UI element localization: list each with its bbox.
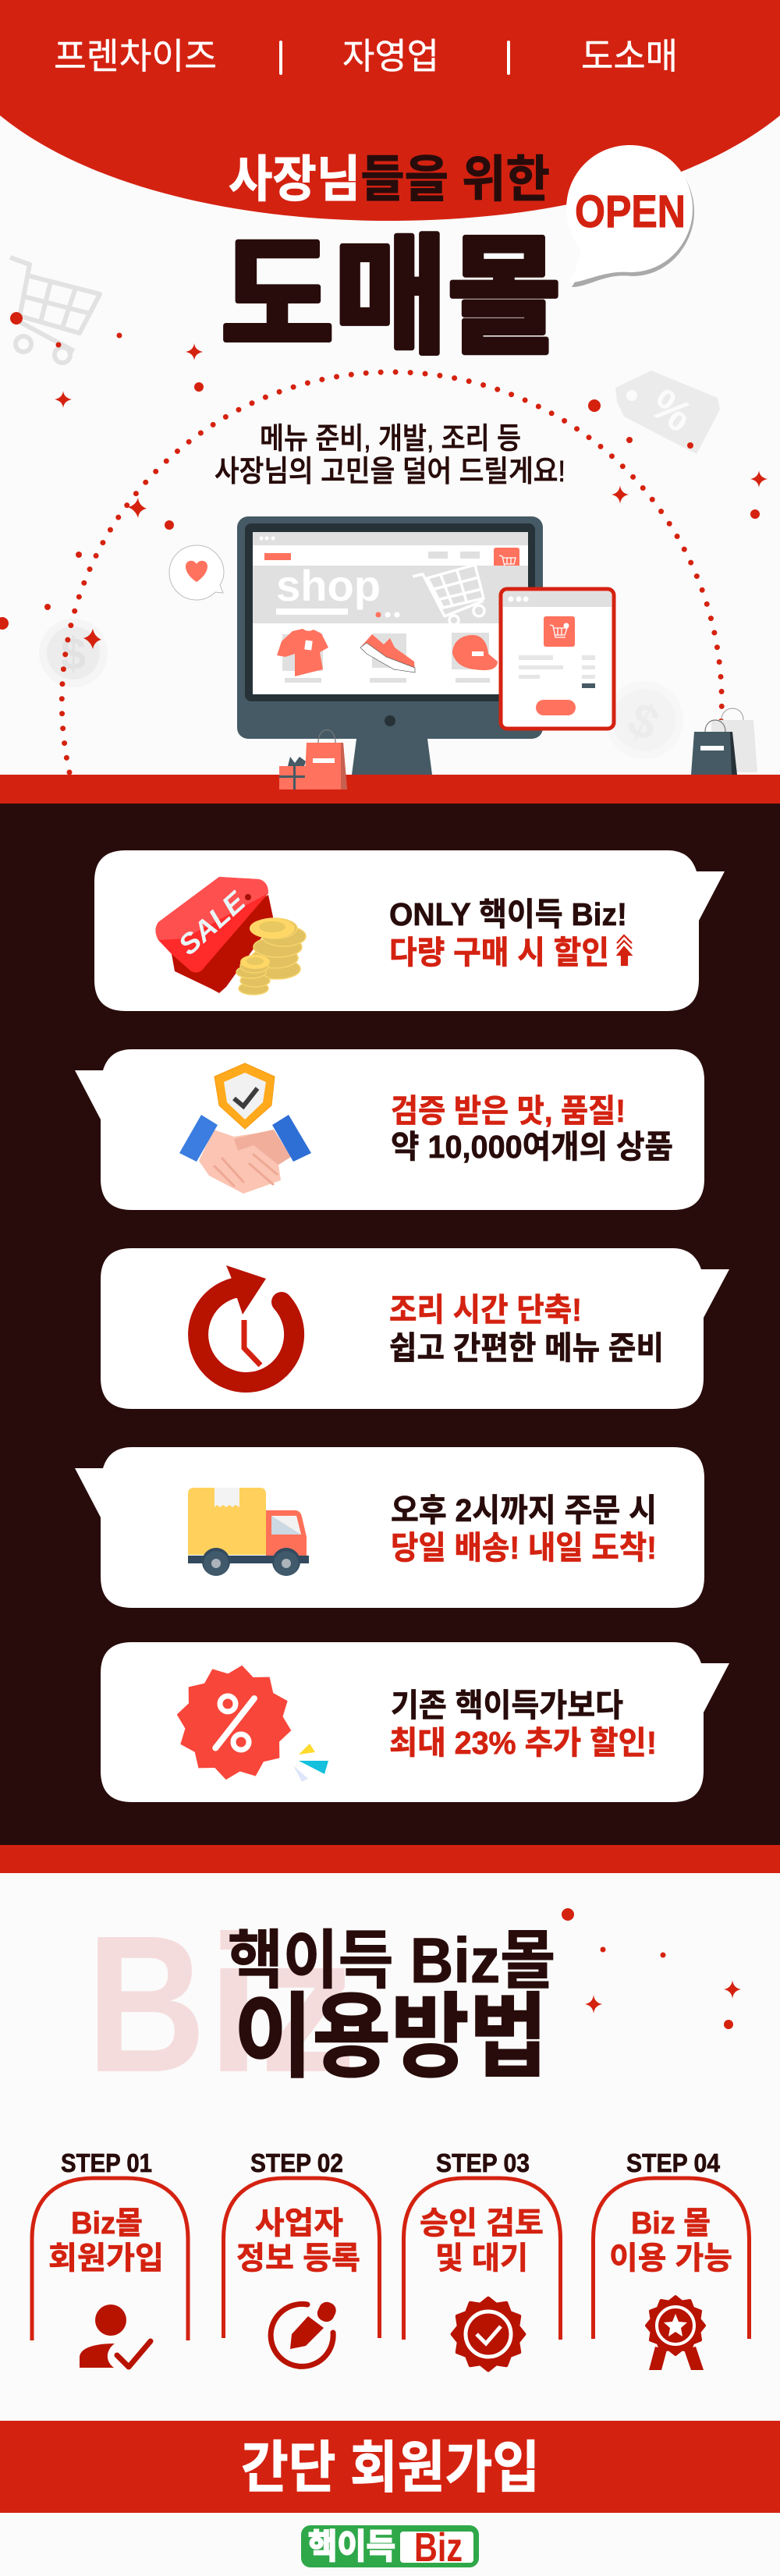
icon: faded dollar coin left: [39, 619, 108, 687]
monitor stand: [352, 739, 432, 775]
step 1: [32, 2148, 188, 2368]
OPEN text: OPEN: [575, 186, 686, 237]
illustration: desktop monitor shop: shop: [276, 561, 381, 610]
banner: [253, 566, 528, 623]
monitor body: [237, 516, 543, 739]
icon: faded shopping cart: [10, 257, 100, 363]
screen nav: [264, 553, 291, 560]
step 2: [223, 2148, 379, 2366]
screen top bar: [253, 532, 528, 545]
ghost Biz watermark: i: [207, 1895, 261, 2113]
nav: franchise: 프렌차이즈: [54, 36, 217, 76]
icon: sale tag and coins: SALE: [172, 885, 252, 961]
big coin stack: [251, 918, 306, 979]
step 1: 회원가입: [48, 2241, 164, 2276]
step 4: 이용 가능: [609, 2241, 732, 2276]
illustration: shopping bags right: [691, 708, 757, 775]
icon: percent badge: [168, 1657, 328, 1788]
arch: [32, 2178, 188, 2340]
ghost Biz watermark: [87, 1895, 356, 2113]
arch: [593, 2178, 749, 2339]
title line 1: 사장님들을 위한: [229, 151, 550, 208]
card: extra discount: [101, 1642, 729, 1802]
icon: shield and handshake: [179, 1063, 311, 1194]
icon: up arrows: [617, 935, 632, 965]
card 2 text: 검증 받은 맛, 품질!: [391, 1093, 626, 1129]
call to action band: [0, 2421, 780, 2513]
t-shirt: [277, 629, 328, 676]
card 1 text: ONLY 핵이득 Biz!: [389, 896, 627, 932]
step label: Biz 몰: [631, 2206, 711, 2241]
card: bulk discount: 다량 구매 시 할인: [389, 935, 609, 970]
card: cooking time: [101, 1248, 729, 1409]
product backgrounds: [282, 634, 323, 671]
illustration: tablet checkout: [501, 589, 614, 729]
red divider band: [0, 1845, 780, 1873]
icon: pen circle: [271, 2299, 339, 2366]
title line 2: 도매몰: [221, 225, 561, 369]
card: verified quality: [75, 1049, 704, 1210]
logo: [301, 2525, 479, 2571]
OPEN speech bubble: [566, 145, 694, 287]
step 1: STEP 01: [61, 2148, 152, 2177]
red curved header: [0, 0, 780, 221]
nav divider 1: [279, 41, 282, 75]
card: bulk discount: [94, 850, 725, 1011]
step label: Biz몰: [71, 2206, 143, 2241]
shoe: [360, 634, 415, 671]
icon: faded dollar coin right: [605, 681, 683, 759]
sparkles and dots: [562, 1908, 741, 2029]
nav: self-employed: 자영업: [342, 36, 439, 76]
icon: sale tag and coins: [156, 877, 306, 995]
heading line 2: 이용방법: [234, 1986, 548, 2089]
red confetti dots: [0, 312, 760, 630]
step 3: STEP 03: [436, 2148, 530, 2177]
illustration: gift and coral bag: [279, 730, 347, 789]
logo Biz: Biz: [414, 2525, 463, 2571]
step 4: [593, 2148, 749, 2370]
icon: check badge: [452, 2298, 524, 2370]
nav: wholesale: 도소매: [581, 36, 678, 76]
card 5 text: 기존 핵이득가보다: [391, 1687, 623, 1723]
icon: faded dollar coin right: $: [620, 692, 667, 752]
arch: [404, 2178, 560, 2340]
ghost Biz watermark: B: [87, 1895, 206, 2113]
icon: faded price tag: [615, 371, 720, 454]
logo wordmark: 핵이득: [308, 2528, 395, 2566]
intro text: [214, 423, 566, 488]
nav divider 2: [507, 41, 510, 75]
card: extra discount: 최대 23% 추가 할인!: [389, 1725, 657, 1761]
icon: faded dollar coin left: $: [61, 629, 86, 679]
hero background decorations: [0, 257, 768, 772]
intro text: 메뉴 준비, 개발, 조리 등: [260, 423, 521, 456]
dark benefits panel: [0, 804, 780, 1845]
dotted arc: [62, 372, 722, 772]
icon: person check: [80, 2305, 151, 2368]
step 3: 및 대기: [435, 2241, 528, 2276]
icon: clock arrow: [198, 1265, 294, 1382]
banner cart: [413, 565, 484, 625]
illustration: desktop monitor shop: [237, 516, 543, 775]
card 4 text: 오후 2시까지 주문 시: [391, 1492, 657, 1528]
card: same-day delivery: [75, 1447, 704, 1608]
section title: how to use: [87, 1895, 741, 2113]
small coin stack: [236, 959, 270, 995]
intro text: 사장님의 고민을 덜어 드릴게요!: [214, 456, 566, 488]
card: verified quality: 약 10,000여개의 상품: [391, 1129, 673, 1165]
card: same-day delivery: 당일 배송! 내일 도착!: [391, 1530, 657, 1566]
top navigation labels: [54, 36, 678, 76]
heading line 1: 핵이득 Biz몰: [228, 1925, 555, 1996]
heart speech bubble: [169, 545, 224, 600]
step 3: [404, 2148, 560, 2370]
cap: [452, 635, 498, 670]
icon: faded price tag: %: [642, 379, 702, 442]
step label: 승인 검토: [420, 2206, 544, 2241]
ghost Biz watermark: z: [259, 1895, 356, 2113]
icon: star ribbon: [647, 2297, 704, 2370]
step 2: 정보 등록: [236, 2241, 360, 2276]
red sparkles: [55, 343, 768, 649]
red band under hero: [0, 775, 780, 804]
step 2: STEP 02: [250, 2148, 343, 2177]
arch: [223, 2178, 379, 2338]
step label: 사업자: [255, 2206, 343, 2241]
product labels: [285, 678, 321, 683]
CTA text: 간단 회원가입: [241, 2437, 540, 2500]
step 4: STEP 04: [626, 2148, 721, 2177]
card: cooking time: 쉽고 간편한 메뉴 준비: [389, 1330, 664, 1366]
title: [221, 151, 561, 369]
card 3 text: 조리 시간 단축!: [389, 1292, 582, 1328]
icon: delivery truck: [188, 1488, 309, 1576]
